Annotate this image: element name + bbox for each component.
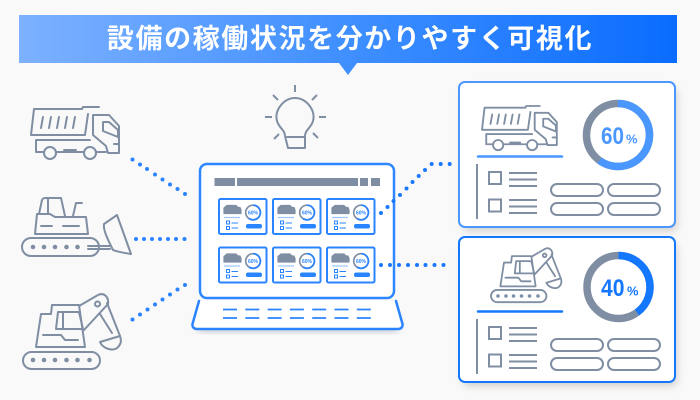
- dotted connector: laptop to lower panel: [379, 263, 446, 267]
- donut chart 60%: [586, 104, 650, 166]
- laptop screen: [200, 164, 394, 298]
- checklist and buttons: [477, 164, 660, 219]
- panel: dump truck status 60%: [459, 82, 677, 231]
- mini dashboard card grid: 60%: [356, 259, 367, 265]
- mini dashboard card grid: 60%: [302, 259, 313, 265]
- donut chart 60%: 60: [601, 123, 624, 150]
- donut chart 60%: %: [626, 132, 638, 146]
- icon: light bulb: [265, 85, 326, 148]
- divider: [478, 155, 562, 158]
- donut chart 40%: [587, 256, 650, 318]
- laptop base: [192, 301, 403, 329]
- checklist and buttons: [477, 319, 660, 374]
- mini dashboard card grid: 60%: [302, 210, 313, 216]
- panel: excavator status 40%: [459, 237, 677, 386]
- laptop: [192, 164, 403, 332]
- divider: [478, 310, 562, 313]
- title banner: 設備の稼働状況を分かりやすく可視化: [107, 24, 593, 54]
- icon: excavator: [491, 248, 561, 302]
- mini dashboard card grid: 60%: [248, 210, 259, 216]
- mini dashboard card grid: [219, 199, 374, 282]
- icon: truck: [482, 106, 557, 150]
- donut chart 40%: %: [627, 284, 639, 298]
- donut chart 40%: 40: [601, 275, 624, 302]
- mini dashboard card grid: 60%: [356, 210, 367, 216]
- screen header bar: [214, 178, 380, 186]
- dotted connector: laptop to upper panel: [379, 162, 452, 215]
- mini dashboard card grid: 60%: [248, 259, 259, 265]
- icon: bulldozer: [22, 198, 131, 256]
- dotted connector: bulldozer to laptop: [134, 237, 186, 241]
- title banner: [19, 15, 677, 75]
- icon: dump truck: [31, 107, 119, 159]
- dotted connector: excavator to laptop: [130, 283, 187, 322]
- dotted connector: truck to laptop: [130, 158, 187, 196]
- icon: excavator: [23, 294, 121, 369]
